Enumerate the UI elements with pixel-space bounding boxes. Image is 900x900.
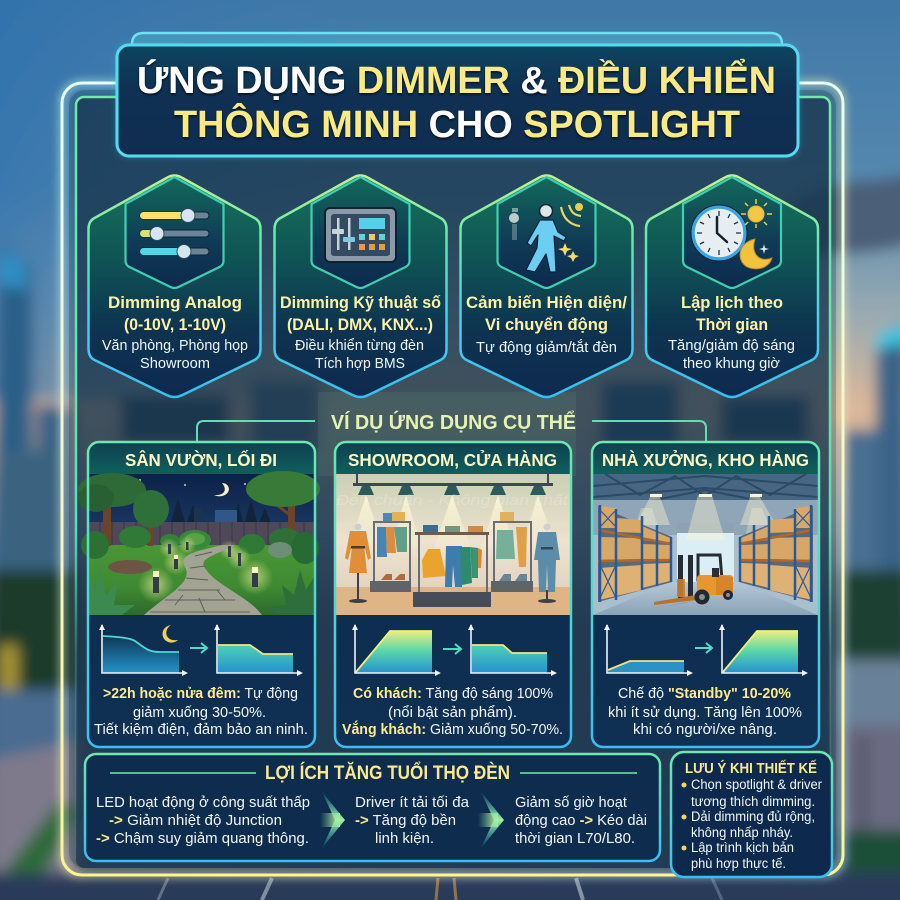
icon: control panel [325, 208, 396, 262]
section heading with connectors: VÍ DỤ ỨNG DỤNG CỤ THỂ [331, 410, 576, 434]
text: showroom: Có khách: Tăng độ sáng 100% [353, 686, 553, 702]
text: time schedule: theo khung giờ [683, 356, 780, 372]
benefit: LED: LED hoạt động ở công suất thấp [96, 794, 310, 811]
notes heading: LƯU Ý KHI THIẾT KẾ [685, 759, 817, 777]
text: dimming digital [280, 294, 441, 372]
panel: time schedule [646, 176, 818, 397]
text: presence sensor [466, 294, 627, 356]
text: warehouse: Chế độ "Standby" 10-20% [618, 686, 791, 702]
title panel [117, 33, 798, 156]
card header: warehouse [592, 442, 819, 474]
panel: design notes [671, 752, 832, 877]
outer glowing frame [62, 83, 843, 875]
notes list: Lập trình kịch bản [691, 840, 794, 855]
benefits heading: LỢI ÍCH TĂNG TUỔI THỌ ĐÈN [265, 762, 510, 784]
card header: showroom: SHOWROOM, CỬA HÀNG [348, 449, 557, 470]
text: dimming analog: Dimming Analog [108, 294, 242, 312]
title text: ỨNG DỤNG DIMMER & ĐIỀU KHIỂN [137, 57, 776, 102]
chart: warehouse before [604, 624, 693, 676]
text: presence sensor: Cảm biến Hiện diện/ [466, 294, 627, 312]
text: warehouse: khi ít sử dụng. Tăng lên 100% [608, 705, 802, 721]
notes list: Dải dimming đủ rộng, [691, 809, 815, 824]
text: dimming analog [102, 294, 248, 372]
benefit: hours: thời gian L70/L80. [515, 830, 635, 847]
notes list: không nhấp nháy. [691, 825, 793, 840]
notes list: phù hợp thực tế. [691, 856, 786, 871]
text: dimming digital: (DALI, DMX, KNX...) [287, 316, 433, 334]
text: dimming digital: Điều khiển từng đèn [295, 338, 424, 354]
road markings at bottom [158, 878, 722, 900]
text: presence sensor: Vi chuyển động [485, 316, 608, 334]
text: dimming digital: Tích hợp BMS [315, 356, 405, 372]
arrow: chevron 1 [320, 792, 345, 848]
benefit: driver [355, 794, 470, 847]
text: presence sensor: Tự động giảm/tắt đèn [476, 339, 617, 356]
text: time schedule [668, 294, 795, 372]
benefit: LED: -> Giảm nhiệt độ Junction [109, 812, 282, 829]
notes list: Chọn spotlight & driver [691, 777, 822, 792]
notes list: tương thích dimming. [691, 794, 815, 809]
illustration: night garden [78, 471, 320, 615]
text: warehouse [608, 686, 802, 738]
card header: garden [88, 442, 315, 474]
chart: warehouse after [719, 624, 808, 676]
section heading with connectors [197, 410, 706, 441]
benefit: driver: -> Tăng độ bền [355, 812, 456, 829]
illustration: warehouse [593, 474, 818, 615]
benefit: LED [96, 794, 310, 847]
text: dimming analog: Showroom [140, 356, 210, 372]
arrow: warehouse [695, 643, 712, 653]
text: garden [94, 686, 308, 738]
panel: dimming digital [274, 176, 446, 397]
text: time schedule: Tăng/giảm độ sáng [668, 338, 795, 354]
arrow: chevron 2 [478, 792, 504, 848]
main dark panel with inner frame [76, 97, 830, 868]
text: time schedule: Lập lịch theo [681, 294, 783, 312]
forklift [678, 555, 693, 598]
panel: presence sensor [460, 176, 632, 397]
text: dimming analog: (0-10V, 1-10V) [124, 316, 226, 334]
panel: dimming analog [88, 176, 260, 397]
benefit: driver: linh kiện. [375, 830, 434, 847]
benefit: hours: Giảm số giờ hoạt [515, 794, 628, 811]
arrow: garden [190, 643, 207, 653]
chart: garden dimming after [214, 624, 303, 676]
text: garden: >22h hoặc nửa đêm: Tự động [103, 686, 298, 702]
benefit: hours [515, 794, 647, 847]
panel: showroom card [335, 442, 571, 747]
panel: warehouse card [592, 442, 819, 747]
text: showroom: (nổi bật sản phẩm). [388, 705, 517, 721]
chart: garden dimming before [99, 624, 188, 676]
watermark tagline: Đèn chuẩn - Không gian chất [336, 492, 569, 509]
card header: showroom [335, 442, 571, 474]
text: time schedule: Thời gian [696, 316, 768, 334]
title text: THÔNG MINH CHO SPOTLIGHT [174, 101, 740, 146]
text: dimming digital: Dimming Kỹ thuật số [280, 294, 441, 312]
panel: garden card [78, 442, 320, 747]
panel: lamp life benefits [85, 754, 660, 861]
chart: showroom before [352, 624, 441, 676]
text: garden: giảm xuống 30-50%. [133, 705, 266, 721]
chart: showroom after [468, 624, 557, 676]
notes list [682, 777, 822, 871]
benefit: hours: động cao -> Kéo dài [515, 812, 647, 829]
arrow: showroom [443, 644, 461, 654]
benefit: LED: -> Chậm suy giảm quang thông. [96, 830, 309, 847]
title text [137, 57, 776, 146]
card header: garden: SÂN VƯỜN, LỐI ĐI [125, 449, 277, 470]
left shelves [598, 506, 672, 602]
icon: sliders [140, 208, 209, 258]
icon: walking person with sensor [509, 203, 583, 272]
text: warehouse: khi có người/xe nâng. [633, 722, 777, 738]
illustration: showroom [335, 474, 571, 615]
right shelves [739, 506, 813, 602]
icon: clock, sun and moon [691, 199, 772, 269]
text: showroom [342, 686, 563, 738]
text: showroom: Vắng khách: Giảm xuống 50-70%. [342, 720, 563, 738]
benefit: driver: Driver ít tải tối đa [355, 794, 470, 811]
watermark block [318, 392, 576, 476]
text: garden: Tiết kiệm điện, đảm bảo an ninh. [94, 722, 308, 738]
card header: warehouse: NHÀ XƯỞNG, KHO HÀNG [602, 449, 809, 470]
text: dimming analog: Văn phòng, Phòng họp [102, 338, 248, 354]
